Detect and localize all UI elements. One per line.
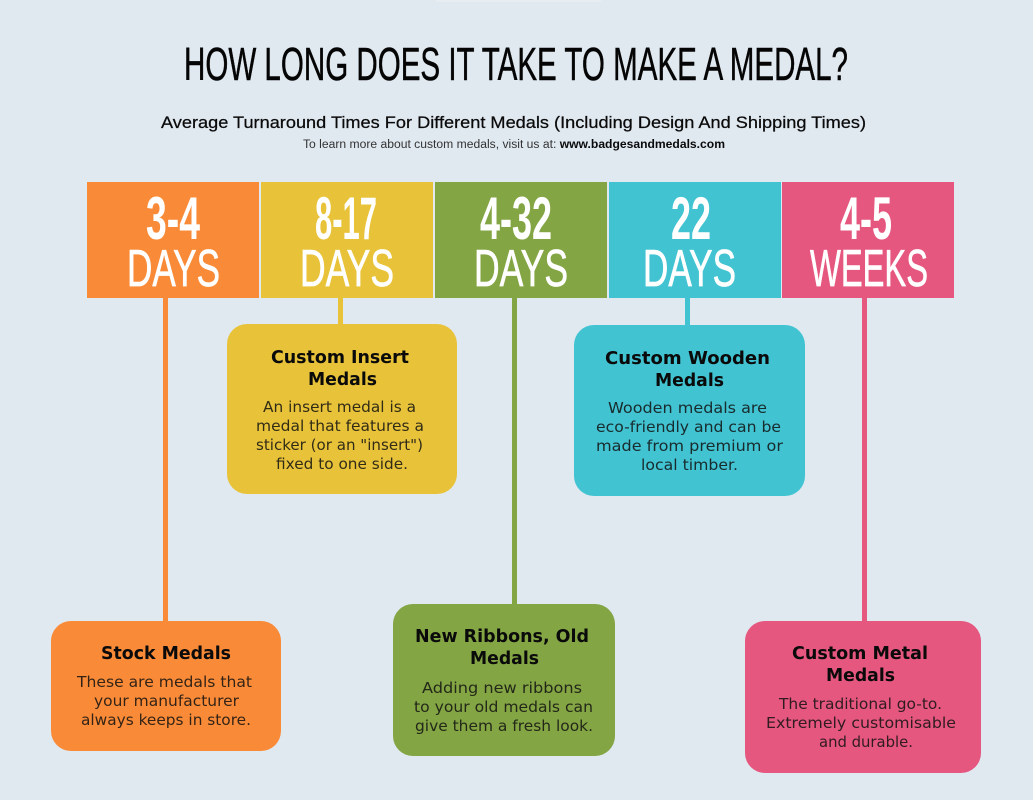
column: custom insert medals — [227, 182, 457, 494]
duration block — [435, 182, 607, 298]
card: custom metal medals — [745, 621, 981, 773]
duration block: 4-32 — [480, 185, 552, 252]
duration block: DAYS — [127, 240, 220, 298]
duration block: 3-4 — [146, 185, 200, 252]
column: custom wooden medals — [574, 182, 805, 496]
card: new ribbons: give them a fresh look. — [415, 717, 593, 735]
duration block: 4-5 — [840, 185, 892, 252]
duration block — [87, 182, 259, 298]
card: custom metal medals: and durable. — [819, 733, 913, 751]
subtitle: Average Turnaround Times For Different Medals (Including Design And Shipping Times) — [161, 113, 866, 132]
connector line — [685, 298, 690, 326]
card: custom wooden medals: local timber. — [641, 456, 738, 474]
card: custom wooden medals — [574, 325, 805, 496]
card: custom metal medals: Custom Metal — [792, 644, 928, 664]
duration block — [609, 182, 781, 298]
duration block: DAYS — [643, 240, 736, 298]
card: custom wooden medals: Custom Wooden — [605, 349, 770, 369]
card: stock medals: Stock Medals — [101, 644, 231, 664]
card: custom wooden medals: made from premium or — [596, 437, 784, 455]
card: custom metal medals: Medals — [826, 666, 895, 686]
column: new ribbons, old medals — [393, 182, 615, 756]
card: stock medals: These are medals that — [76, 673, 252, 691]
duration block: 8-17 — [315, 185, 377, 252]
card: custom insert medals: medal that features a — [256, 417, 424, 435]
column: custom metal medals — [745, 182, 981, 773]
card: custom wooden medals: eco-friendly and can be — [596, 418, 781, 436]
card: custom metal medals: The traditional go-to. — [778, 695, 942, 713]
duration block: 22 — [671, 185, 711, 252]
card: custom insert medals: Medals — [308, 370, 377, 390]
card: custom insert medals — [227, 324, 457, 494]
card: new ribbons: Adding new ribbons — [422, 679, 582, 697]
card: stock medals: always keeps in store. — [81, 711, 251, 729]
card: new ribbons: to your old medals can — [414, 698, 593, 716]
duration block: DAYS — [474, 240, 568, 298]
card: stock medals: your manufacturer — [94, 692, 240, 710]
connector line — [512, 298, 517, 605]
column: stock medals — [51, 182, 281, 751]
duration block: WEEKS — [810, 240, 928, 298]
card: custom wooden medals: Medals — [655, 371, 724, 391]
card: custom insert medals: Custom Insert — [271, 348, 409, 368]
duration block — [782, 182, 954, 298]
duration block — [261, 182, 433, 298]
website note: To learn more about custom medals, visit us at: www.badgesandmedals.com — [303, 139, 725, 151]
card: custom insert medals: fixed to one side. — [276, 455, 408, 473]
card: custom insert medals: An insert medal is a — [263, 398, 416, 416]
card: custom metal medals: Extremely customisable — [766, 714, 956, 732]
card: new ribbons: Medals — [470, 649, 539, 669]
card: custom insert medals: sticker (or an "insert") — [256, 436, 423, 454]
card: custom wooden medals: Wooden medals are — [608, 399, 767, 417]
duration block: DAYS — [300, 240, 394, 298]
card: new ribbons: New Ribbons, Old — [415, 627, 589, 647]
card: stock medals — [51, 621, 281, 751]
connector line — [338, 298, 343, 325]
connector line — [163, 298, 168, 622]
connector line — [862, 298, 867, 622]
card: new ribbons — [393, 604, 615, 756]
